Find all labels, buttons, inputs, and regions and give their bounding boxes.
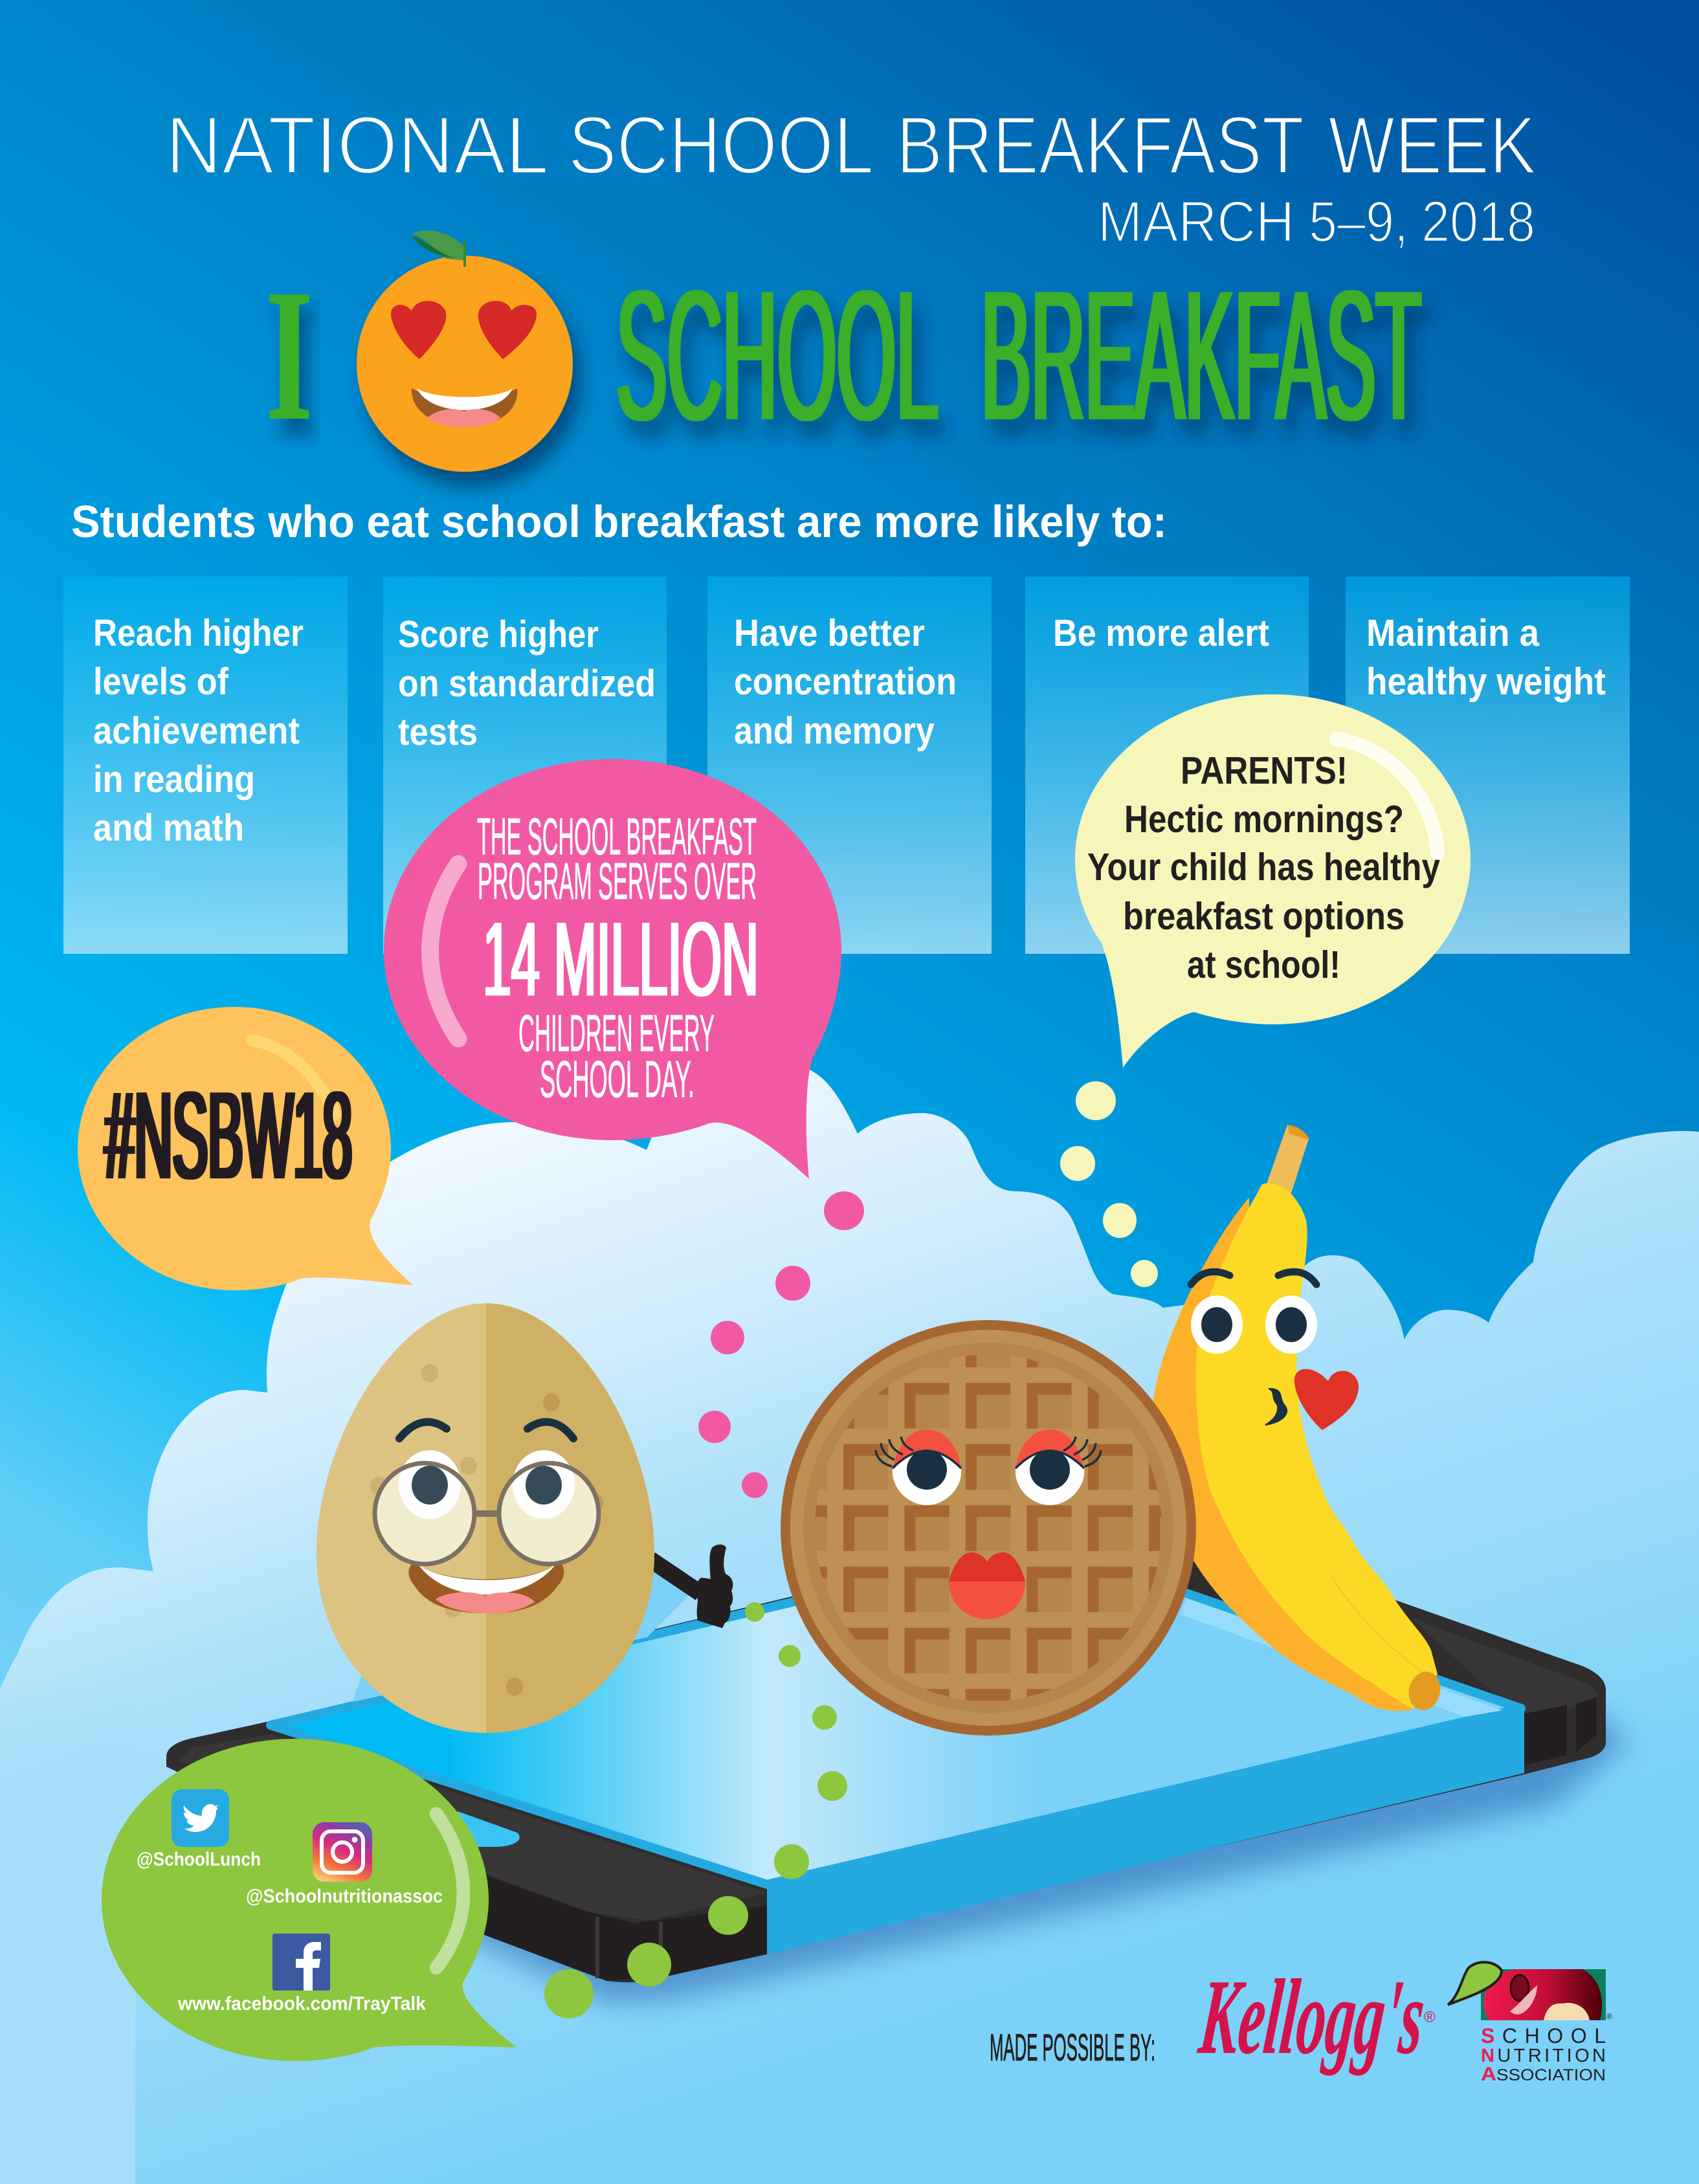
panel: score higher [383,577,667,954]
clouds [0,1068,1699,2184]
green dots [544,1602,847,2018]
banana stem [1265,1125,1309,1197]
banana end [1405,1668,1445,1714]
phone right side panels [1524,1705,1567,1765]
panel: score higher: on standardized [398,663,656,705]
panel: concentration: and memory [734,710,935,752]
phone top face right [1411,1618,1597,1721]
panel: concentration: concentration [734,661,957,703]
callout: 14 million children [384,759,841,1179]
callout: 14 million children: PROGRAM SERVES OVER [478,852,757,910]
callout: 14 million children: 14 MILLION [483,901,759,1018]
green bubble [102,1739,516,2061]
icon: facebook [272,1934,330,1991]
waffle left eye [876,1429,961,1505]
callout: parents: at school! [1187,943,1340,986]
banana eyes [1191,1296,1243,1354]
banana eyebrows [1191,1272,1316,1285]
callout: 14 million children: THE SCHOOL BREAKFAST [477,808,757,865]
cloud: lower left band [0,1682,135,2184]
panel: concentration [707,577,992,954]
bubble highlight [252,1041,335,1114]
text: MADE POSSIBLE BY: [990,2027,1155,2069]
callout: parents [1075,694,1471,1068]
instagram handle: @Schoolnutritionassoc [246,1886,443,1907]
panel: reach higher: levels of [93,661,229,703]
title: WEEK [1328,100,1537,191]
logo: Kellogg's: ® [1424,2009,1436,2026]
yellow dots [1060,1081,1158,1287]
screen reflection [1181,1598,1502,1717]
date: 5–9, [1309,189,1408,254]
potato spots [370,1364,603,1696]
callout: parents: Hectic mornings? [1124,798,1404,841]
callout: parents: breakfast options [1123,895,1405,938]
potato arm and hand [650,1545,733,1628]
screen [271,1543,1521,1884]
phone shadow [175,1682,1628,2003]
banana body [1151,1184,1413,1711]
callout: hashtag: #NSBW18 [105,1067,352,1204]
letter I: I [266,251,313,459]
callout: parents: Your child has healthy [1087,846,1440,888]
panel: alert [1025,577,1309,954]
phone front edge [767,1708,1524,1954]
icon: instagram [313,1822,372,1882]
waffle grid [815,1354,1162,1701]
panel: reach higher: and math [93,807,244,849]
date [1098,189,1535,254]
logo: Kellogg's [1194,1958,1436,2076]
title [166,100,1537,191]
title: SCHOOL [568,100,874,191]
cloud: all lobes [0,1068,1699,2184]
apple icon [1448,1962,1612,2021]
pink bubble [384,759,841,1179]
bubble text: PARENTS! [1181,749,1348,792]
icon: twitter [172,1789,229,1847]
callout: 14 million children: CHILDREN EVERY [518,1004,715,1062]
apple icon: ® [1606,2012,1612,2021]
callout: 14 million children: SCHOOL DAY. [540,1050,694,1108]
screen glow behind potato [353,1556,694,1702]
waffle right eye [1016,1429,1101,1505]
phone top face left [178,1734,767,1921]
icon: orange with heart eyes [357,230,573,472]
phone tray [166,1530,1628,2003]
potato eyebrows [399,1422,573,1439]
panel: score higher: tests [398,711,478,753]
bubble highlight [430,864,458,1039]
twitter handle: @SchoolLunch [137,1849,261,1870]
waffle character [781,1320,1196,1736]
potato character [316,1303,733,1733]
date: MARCH [1098,189,1294,254]
panel: healthy weight: healthy weight [1366,661,1606,703]
banana character [1151,1125,1445,1714]
bubble highlight [436,1814,463,1968]
logo: School Nutrition Association: ASSOCIATION [1481,2064,1606,2085]
panel: reach higher: in reading [93,758,255,800]
potato body [316,1303,654,1733]
callout: hashtag [78,1007,413,1290]
panel: alert: Be more alert [1053,612,1269,654]
panel: reach higher: achievement [93,710,300,752]
logo: I love school breakfast: SCHOOL [616,252,938,459]
heart [1294,1369,1359,1430]
yellow bubble [1075,694,1471,1068]
waffle rings [781,1320,1196,1736]
bubble highlight [1337,739,1438,854]
panel: concentration: Have better [734,612,925,654]
callout: social media [102,1739,516,2061]
panel: reach higher: Reach higher [93,612,304,654]
title: NATIONAL [166,100,549,191]
home button notch [453,1811,520,1847]
phone body [166,1530,1606,1982]
date: 2018 [1421,189,1535,254]
logo: Kellogg's: Kellogg's [1194,1958,1430,2076]
panel: healthy weight: Maintain a [1366,612,1540,654]
waffle lips [949,1552,1025,1619]
SNA wordmark: S CHOOL [1481,2024,1606,2047]
logo: School Nutrition Association: NUTRITION [1481,2046,1606,2066]
phone left side [453,1864,767,1981]
heading: students: Students who eat school breakfast are more likely to: [71,496,1167,547]
panel: score higher: Score higher [398,613,599,656]
potato mouth [408,1561,564,1613]
pink dots [698,1191,864,1498]
panel: healthy weight [1346,577,1630,954]
facebook url: www.facebook.com/TrayTalk [177,1993,426,2014]
panel: reach higher [63,577,348,954]
logo: School Nutrition Association [1448,1962,1612,2085]
logo: I love school breakfast [266,230,1421,472]
potato glasses and eyes [375,1450,599,1564]
banana kissing mouth [1265,1389,1287,1425]
orange bubble [78,1007,413,1290]
title: BREAKFAST [896,100,1304,191]
